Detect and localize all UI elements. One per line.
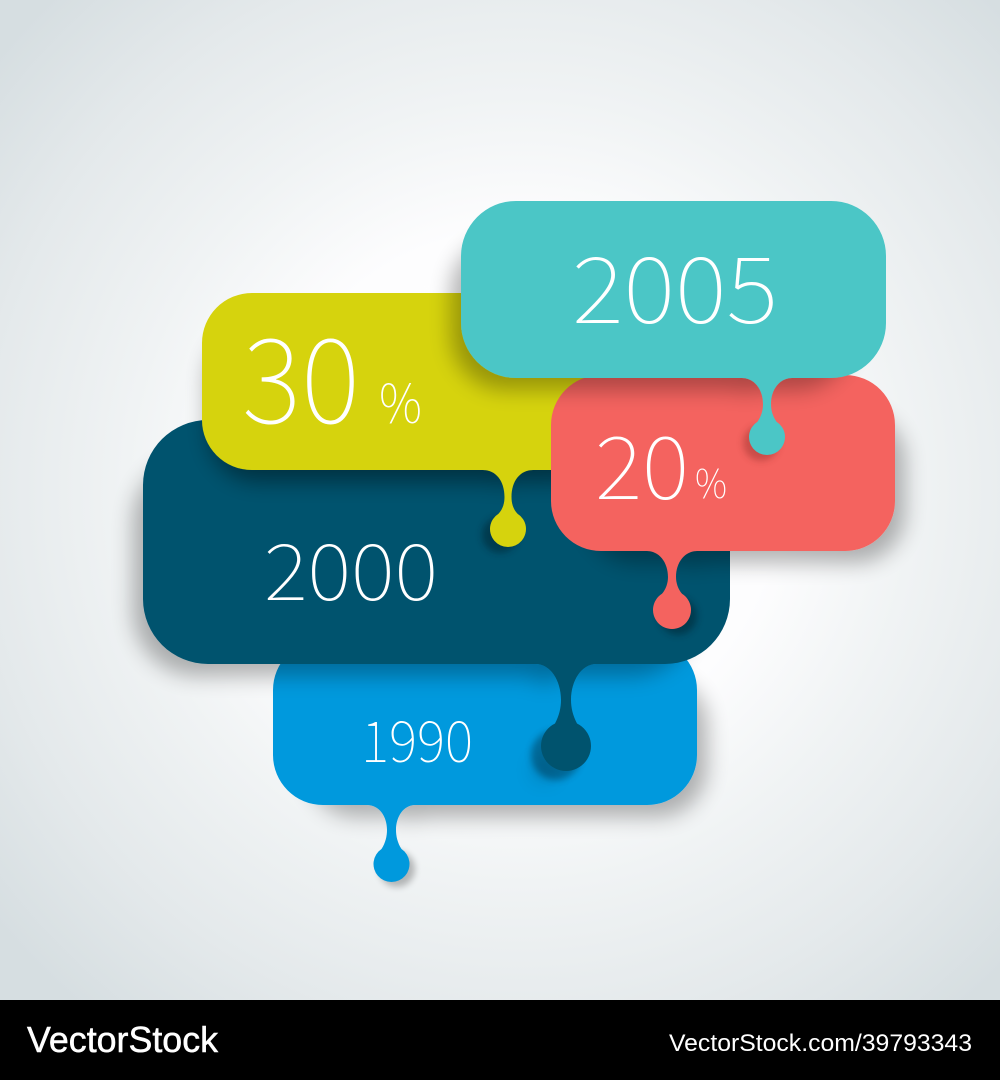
label: percent sign: % xyxy=(379,360,422,439)
label: 1990: 1990 xyxy=(361,697,473,779)
bubble: navy xyxy=(143,420,730,771)
footer bar xyxy=(0,1000,1000,1080)
label: 30: 30 xyxy=(242,286,360,457)
label: percent sign: % xyxy=(695,452,727,510)
panel: 2000 xyxy=(143,420,730,780)
bubble: yellow xyxy=(202,293,620,547)
image id: VectorStock.com/39793343 xyxy=(669,1030,972,1057)
logo: VectorStock: VectorStock xyxy=(27,1019,219,1060)
label: 2005: 2005 xyxy=(572,217,778,350)
label: 2000: 2000 xyxy=(264,511,438,623)
panel: 30% xyxy=(202,286,620,553)
label: 20: 20 xyxy=(595,399,689,525)
panel: 1990 xyxy=(273,640,697,887)
bubble: teal xyxy=(461,201,886,455)
panel: 20% xyxy=(551,375,895,635)
bubble: red xyxy=(551,375,895,629)
panel: 2005 xyxy=(461,201,886,461)
bubble: blue xyxy=(273,640,697,882)
